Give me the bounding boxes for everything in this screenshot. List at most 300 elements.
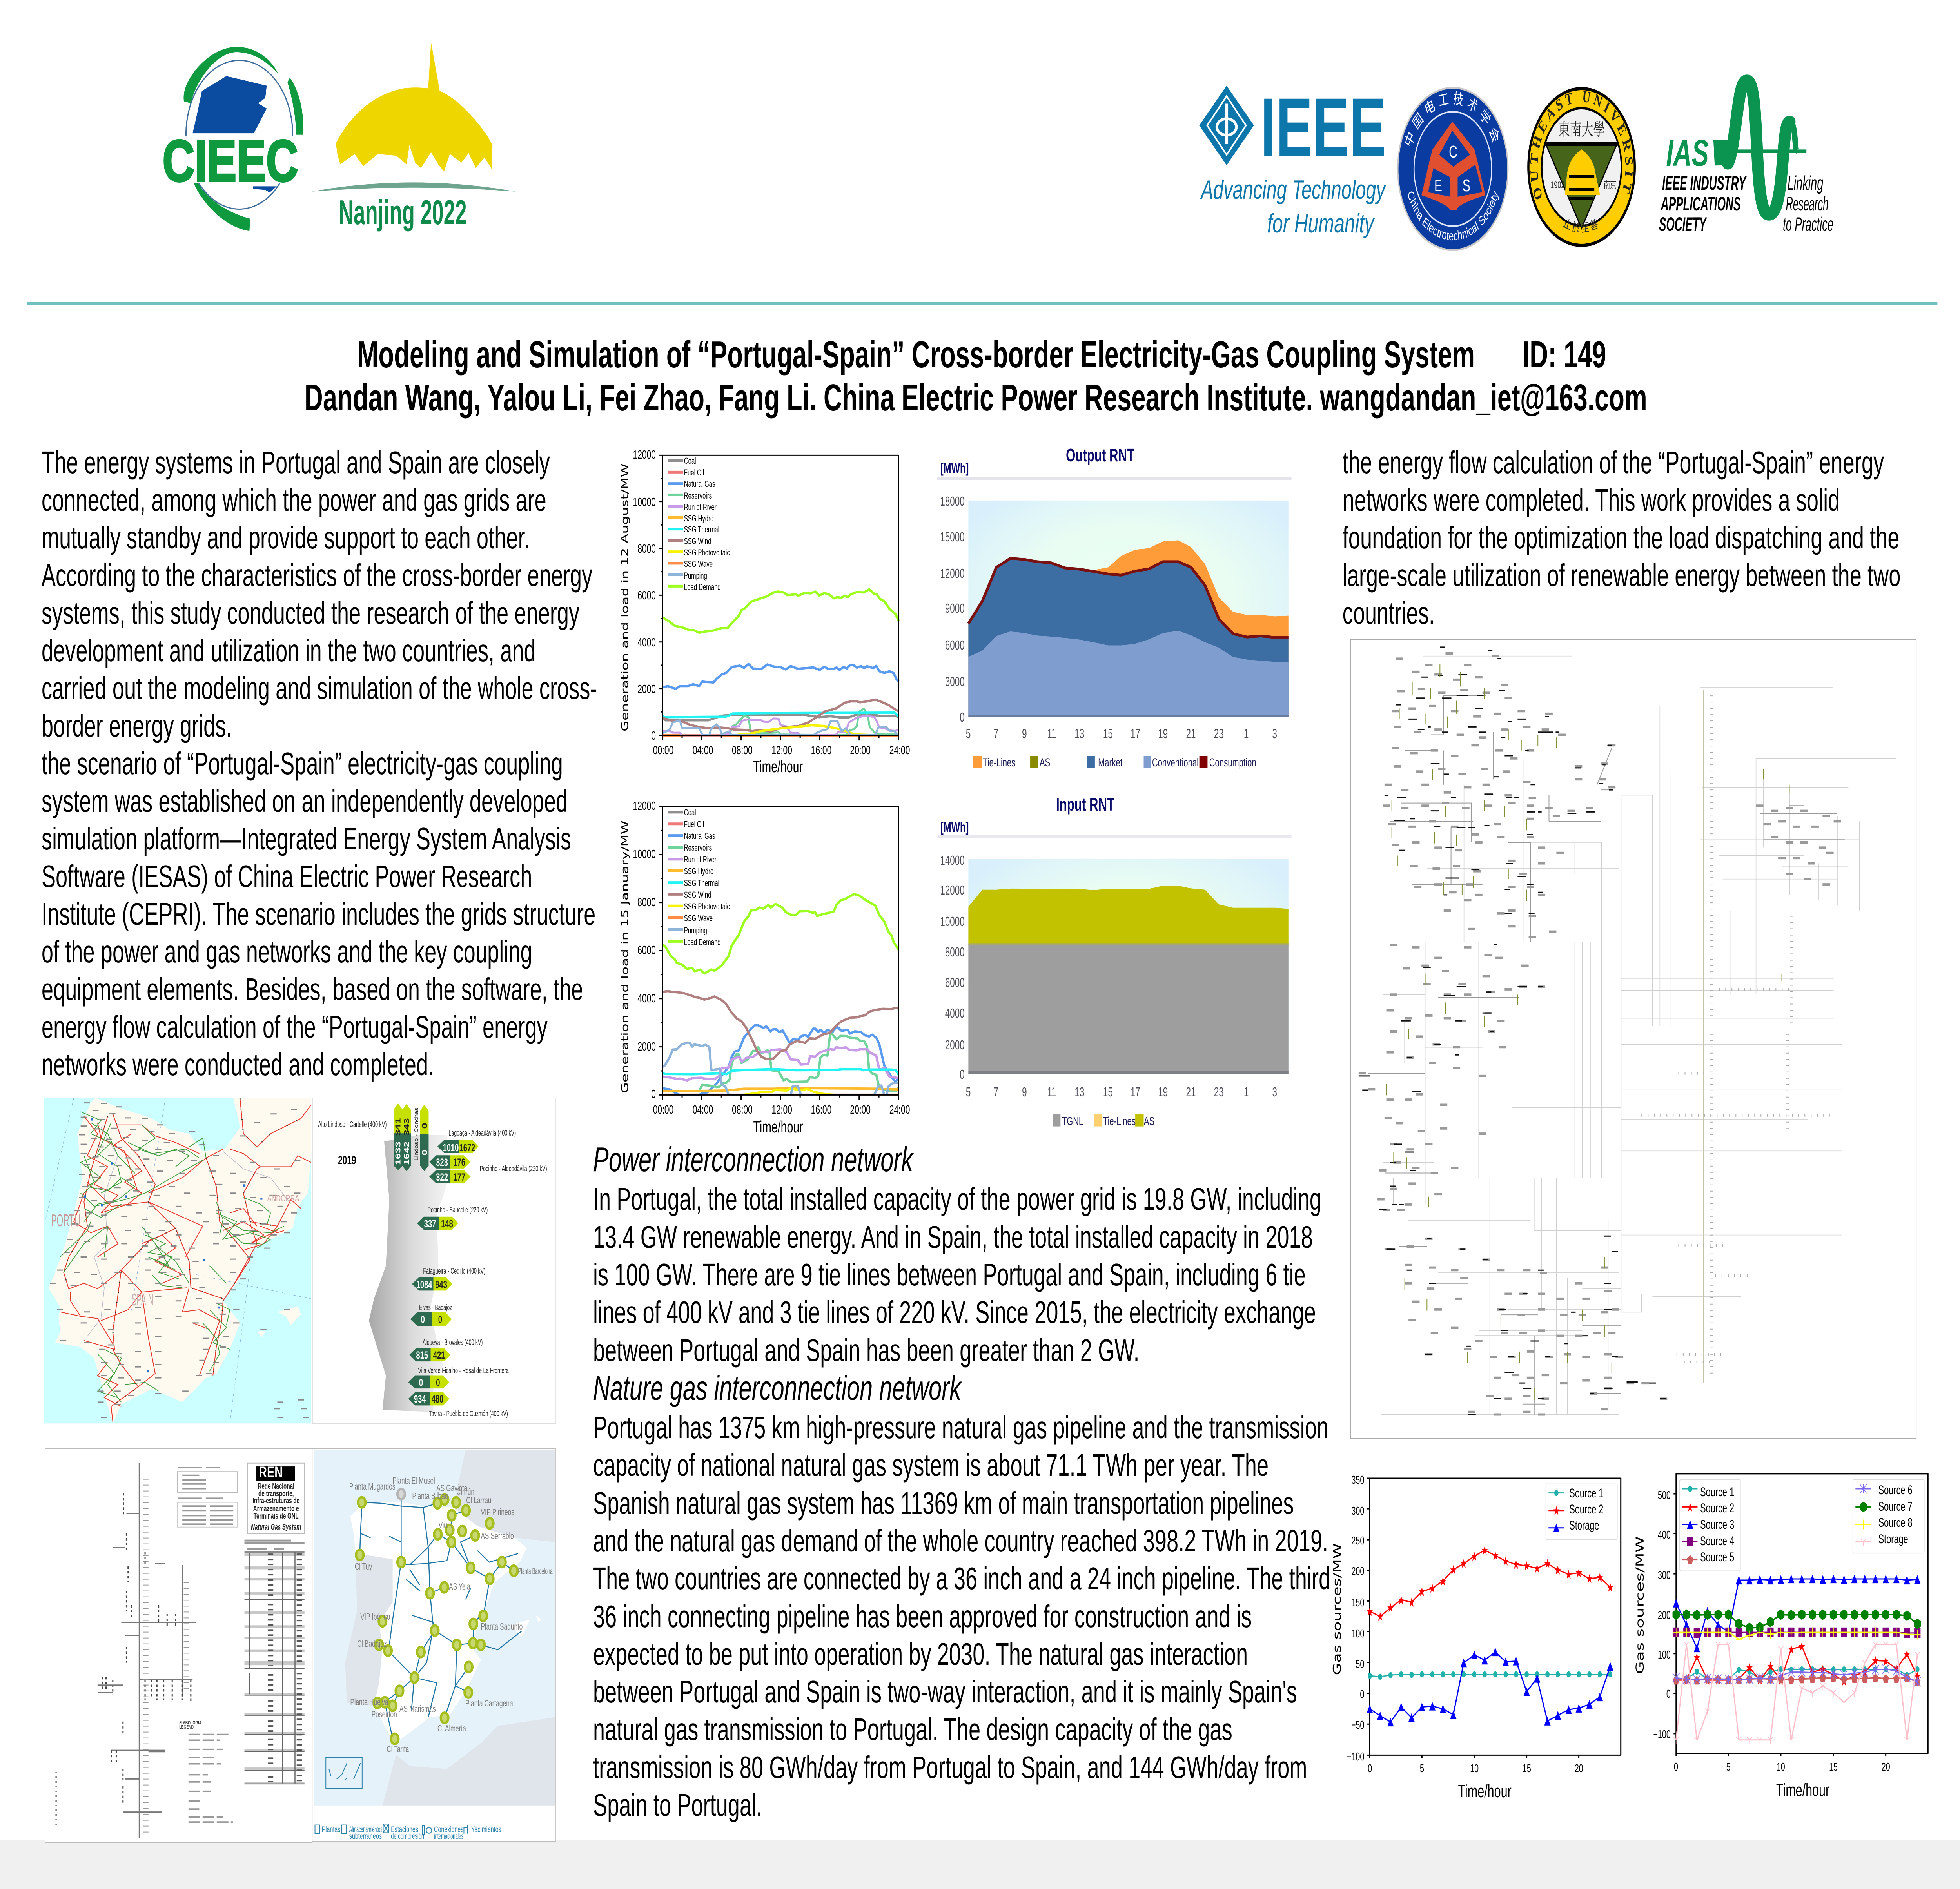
map: tie line flows 2019: 341 <box>394 1118 402 1136</box>
chart: generation and load 12 August: SSG Photovoltaic <box>684 548 730 557</box>
chart: Input RNT: 0 <box>960 1067 965 1082</box>
chart: generation and load 15 January: 8000 <box>637 895 656 909</box>
map: Spanish gas network <box>312 1449 556 1841</box>
map: tie line flows 2019: Tavira - Puebla de Guzmán (400 kV) <box>429 1409 508 1418</box>
text block: introduction: development and utilization in the two countries, and <box>42 633 536 668</box>
chart: generation and load 15 January: 12:00 <box>771 1103 792 1116</box>
map: Spanish gas network: Planta Sagunto <box>481 1622 523 1632</box>
chart: generation and load 12 August: Pumping <box>684 571 707 581</box>
text block: introduction: mutually standby and provide support to each other. <box>42 521 530 555</box>
chart: Output RNT: 9000 <box>945 601 965 615</box>
text block: power interconnection: In Portugal, the total installed capacity of the power grid is 19.8 GW, including <box>593 1182 1321 1217</box>
logo: IEEE Industry Applications Society: IAS <box>1666 132 1709 174</box>
chart: Input RNT: 10000 <box>940 914 965 929</box>
chart: gas sources 9-source case: 100 <box>1658 1649 1671 1661</box>
chart: generation and load 12 August: SSG Hydro <box>684 514 713 523</box>
text block: power interconnection: between Portugal and Spain has been greater than 2 GW. <box>593 1333 1140 1368</box>
chart: Output RNT: AS <box>1040 756 1050 769</box>
chart: generation and load 15 January: 2000 <box>637 1040 656 1053</box>
paper ID: ID: 149 <box>1523 334 1606 376</box>
logo: CIEEC: CIEEC <box>163 128 298 194</box>
chart: Output RNT: 13 <box>1074 726 1084 741</box>
text block: introduction: system was established on an independently developed <box>42 784 568 819</box>
chart: generation and load 12 August: Time/hour <box>753 758 803 776</box>
map: Iberian power grid: SPAIN <box>132 1290 153 1309</box>
map: tie line flows 2019: 1642 <box>403 1141 410 1165</box>
map: tie line flows 2019: 934 <box>414 1393 426 1405</box>
chart: generation and load 12 August: 10000 <box>633 495 656 509</box>
chart: gas sources 3-source case: 150 <box>1352 1597 1364 1609</box>
map: Spanish gas network: internacionales <box>434 1831 463 1841</box>
chart: Input RNT <box>937 795 1292 1128</box>
chart: Input RNT: 19 <box>1158 1085 1168 1099</box>
map: Spanish gas network: AS Gaviota <box>436 1483 467 1493</box>
chart: generation and load 12 August: 04:00 <box>693 743 713 757</box>
logo: China Electrotechnical Society: China Electrotechnical Society <box>1405 188 1500 243</box>
map: tie line flows 2019: Alto Lindoso - Cartelle (400 kV) <box>318 1120 387 1129</box>
chart: Output RNT: 11 <box>1047 726 1056 741</box>
chart: generation and load 12 August: 4000 <box>637 635 656 649</box>
map: Spanish gas network: Cl Larrau <box>466 1495 491 1506</box>
chart: generation and load 15 January: Coal <box>684 807 696 817</box>
map: tie line flows 2019: 323 <box>436 1156 448 1168</box>
chart: gas sources 9-source case: 300 <box>1658 1569 1671 1582</box>
text block: gas interconnection: transmission is 80 GWh/day from Portugal to Spain, and 144 GWh/day from <box>593 1750 1307 1785</box>
logo: IEEE: Advancing Technology <box>1200 175 1386 205</box>
chart: generation and load 12 August: SSG Wave <box>684 559 713 569</box>
map: tie line flows 2019: Alqueva - Brovales (400 kV) <box>423 1338 483 1347</box>
chart: generation and load 12 August: 24:00 <box>889 743 910 757</box>
chart: gas sources 3-source case: 50 <box>1356 1658 1364 1671</box>
map: tie line flows 2019: 0 <box>436 1376 440 1388</box>
chart: Input RNT: 9 <box>1022 1085 1027 1099</box>
chart: generation and load 15 January: SSG Wave <box>684 913 713 923</box>
map: Spanish gas network: Almacenamientos <box>349 1825 383 1834</box>
chart: Output RNT: Market <box>1098 756 1122 769</box>
map: Spanish gas network: Cl Tarifa <box>387 1744 409 1755</box>
logo: Southeast University: 止於至善 <box>1563 216 1601 235</box>
chart: gas sources 9-source case: Source 2 <box>1700 1501 1734 1515</box>
map: tie line flows 2019: Lindoso - Conchas <box>413 1107 419 1160</box>
map: Spanish gas network: VIP Pirineos <box>481 1507 514 1517</box>
text block: gas interconnection <box>593 1410 1330 1823</box>
chart: gas sources 9-source case: Source 5 <box>1700 1550 1734 1564</box>
chart: gas sources 3-source case: 0 <box>1360 1688 1364 1701</box>
logo: IEEE Industry Applications Society: to Practice <box>1783 214 1833 236</box>
map: Spanish gas network: AS Marismas <box>399 1704 436 1714</box>
text block: power interconnection: 13.4 GW renewable energy. And in Spain, the total installed capacity in 2018 <box>593 1220 1313 1255</box>
chart: gas sources 9-source case: 20 <box>1882 1761 1890 1773</box>
chart: generation and load 15 January: Time/hour <box>753 1118 803 1136</box>
text block: power interconnection: lines of 400 kV and 3 tie lines of 220 kV. Since 2015, the electricity exchange <box>593 1295 1316 1330</box>
map: tie line flows 2019: 343 <box>403 1118 410 1136</box>
text block: introduction: Software (IESAS) of China Electric Power Research <box>42 859 532 894</box>
chart: generation and load 15 January: 08:00 <box>732 1103 753 1116</box>
logo: China Electrotechnical Society: 中国电工技术学会 <box>1403 90 1503 150</box>
map: tie line flows 2019: 177 <box>453 1171 465 1183</box>
chart: generation and load 15 January: Natural Gas <box>684 831 715 841</box>
chart: gas sources 3-source case: Source 1 <box>1569 1486 1603 1500</box>
map: tie line flows 2019: 480 <box>432 1393 443 1405</box>
chart: Input RNT: 7 <box>993 1085 998 1099</box>
chart: Input RNT: 23 <box>1214 1085 1224 1099</box>
chart: Output RNT: 18000 <box>940 494 965 508</box>
map: Spanish gas network: Poseidón <box>372 1709 397 1720</box>
chart: gas sources 9-source case: Gas sources/MW <box>1633 1536 1646 1674</box>
text block: gas interconnection: Portugal has 1375 km high-pressure natural gas pipeline and the transmission <box>593 1410 1328 1445</box>
chart: gas sources 3-source case: 0 <box>1368 1762 1372 1775</box>
text block: gas interconnection: expected to be put into operation by 2030. The natural gas interaction <box>593 1637 1248 1672</box>
chart: gas sources 9-source case: Source 7 <box>1878 1499 1913 1513</box>
map: Spanish gas network: Cl Irún <box>456 1487 474 1497</box>
chart: generation and load 15 January: Reservoirs <box>684 843 712 853</box>
chart: Output RNT: 9 <box>1022 726 1027 741</box>
chart: Input RNT: 3 <box>1272 1085 1277 1099</box>
chart: Output RNT: Tie-Lines <box>983 756 1015 769</box>
logo: China Electrotechnical Society <box>1398 88 1508 250</box>
map: tie line flows 2019: 337 <box>424 1218 436 1230</box>
chart: Output RNT: 3 <box>1272 726 1277 741</box>
map: tie line flows 2019: 815 <box>416 1349 428 1361</box>
chart: Input RNT: 21 <box>1186 1085 1196 1099</box>
chart: generation and load 12 August: 16:00 <box>811 743 831 757</box>
chart: gas sources 3-source case: 250 <box>1352 1535 1364 1547</box>
chart: generation and load 12 August: 12:00 <box>771 743 792 757</box>
chart: gas sources 9-source case: Source 3 <box>1700 1517 1734 1532</box>
logo: IEEE: for Humanity <box>1267 209 1375 238</box>
chart: Input RNT: TGNL <box>1062 1115 1083 1128</box>
chart: Output RNT: Output RNT <box>1066 445 1134 466</box>
text block: introduction: Institute (CEPRI). The scenario includes the grids structure <box>42 897 595 932</box>
map: Spanish gas network: Planta El Musel <box>392 1476 435 1486</box>
text block: introduction: The energy systems in Portugal and Spain are closely <box>42 445 550 480</box>
chart: Output RNT: 6000 <box>945 638 965 652</box>
map: tie line flows 2019: 943 <box>435 1278 447 1290</box>
logo: IEEE Industry Applications Society: APPLICATIONS <box>1661 193 1741 215</box>
chart: gas sources 9-source case: 500 <box>1658 1489 1671 1502</box>
text block: power interconnection <box>593 1182 1321 1368</box>
chart: generation and load 12 August: SSG Wind <box>684 536 711 546</box>
text block: introduction: of the power and gas networks and the key coupling <box>42 935 532 969</box>
chart: generation and load 15 January: 24:00 <box>889 1103 910 1116</box>
logo: IEEE Industry Applications Society: Linking <box>1788 172 1823 194</box>
map: Spanish gas network: Planta Bilbao <box>412 1491 448 1501</box>
map: tie line flows 2019: 1672 <box>459 1141 475 1154</box>
chart: generation and load 12 August: 2000 <box>637 682 656 696</box>
text block: power interconnection: is 100 GW. There are 9 tie lines between Portugal and Spain, including 6 tie <box>593 1258 1306 1292</box>
chart: gas sources 3-source case: Storage <box>1569 1518 1599 1532</box>
chart: generation and load 12 August: 00:00 <box>653 743 673 757</box>
text block: introduction: equipment elements. Besides, based on the software, the <box>42 972 583 1007</box>
chart: Input RNT: 14000 <box>940 853 965 867</box>
chart: Output RNT: [MWh] <box>940 461 969 476</box>
chart: Output RNT: 15 <box>1103 726 1113 741</box>
chart: Input RNT: 15 <box>1103 1085 1113 1099</box>
map: tie line flows 2019: 1633 <box>394 1141 402 1165</box>
text block: gas interconnection: between Portugal and Spain is two-way interaction, and it is mainly Spain's <box>593 1675 1297 1709</box>
chart: generation and load 15 January: SSG Hydro <box>684 866 713 876</box>
chart: generation and load 12 August: Fuel Oil <box>684 468 704 477</box>
map: Spanish gas network: Planta Mugardos <box>349 1482 396 1492</box>
map: tie line flows 2019: 421 <box>433 1349 445 1361</box>
text block: gas interconnection: Spanish natural gas system has 11369 km of main transportation pipelines <box>593 1486 1294 1521</box>
diagram: Portugal-Spain power and gas network model <box>1350 639 1916 1439</box>
header divider <box>27 302 1937 305</box>
logo: China Electrotechnical Society: S <box>1463 176 1470 195</box>
chart: Output RNT: 15000 <box>940 530 965 544</box>
chart: generation and load 15 January: Run of River <box>684 855 717 864</box>
logo: CIEEC <box>163 47 309 231</box>
map: Spanish gas network: VIP Ibérico <box>360 1612 390 1622</box>
chart: generation and load 12 August: Reservoirs <box>684 491 712 501</box>
map: Spanish gas network: Planta Cartagena <box>465 1698 513 1709</box>
chart: generation and load 12 August: Natural Gas <box>684 479 715 489</box>
chart: gas sources 3-source case: 350 <box>1352 1474 1364 1486</box>
chart: generation and load 12 August: 6000 <box>637 588 656 602</box>
map: Spanish gas network: AS Yela <box>449 1582 470 1592</box>
logo: Southeast University: 南京 <box>1604 180 1616 191</box>
chart: Output RNT <box>937 445 1292 769</box>
map: tie line flows 2019 <box>312 1098 556 1423</box>
chart: Output RNT: 1 <box>1244 726 1249 741</box>
map: tie line flows 2019: 176 <box>453 1156 465 1168</box>
map: Spanish gas network: C. Almería <box>437 1724 466 1734</box>
chart: Output RNT: Consumption <box>1209 756 1256 769</box>
chart: generation and load 12 August: 0 <box>651 729 656 742</box>
chart: Input RNT: 4000 <box>945 1006 965 1020</box>
map: tie line flows 2019: Vila Verde Ficalho - Rosal de La Frontera <box>418 1366 509 1375</box>
chart: generation and load 15 January: 04:00 <box>693 1103 713 1116</box>
chart: Input RNT: 8000 <box>945 945 965 959</box>
text block: introduction: border energy grids. <box>42 709 232 744</box>
chart: generation and load 15 January: 10000 <box>633 847 656 861</box>
chart: generation and load 15 January: 16:00 <box>811 1103 831 1116</box>
chart: Input RNT: Input RNT <box>1056 795 1114 815</box>
chart: generation and load 15 January: 6000 <box>637 943 656 957</box>
map: tie line flows 2019: 0 <box>421 1123 429 1129</box>
chart: Output RNT: 17 <box>1131 726 1140 741</box>
map: Spanish gas network: subterráneos <box>349 1831 382 1841</box>
chart: gas sources 3-source case: Time/hour <box>1458 1782 1512 1802</box>
map: tie line flows 2019: 1010 <box>443 1141 459 1154</box>
text block: introduction <box>42 445 597 1082</box>
chart: Output RNT: 23 <box>1214 726 1224 741</box>
chart: generation and load 12 August: Coal <box>684 456 696 466</box>
logo: IEEE Industry Applications Society: Research <box>1786 193 1828 215</box>
map: tie line flows 2019: Falagueira - Cedillo (400 kV) <box>423 1267 485 1276</box>
chart: gas sources 3-source case <box>1331 1474 1621 1802</box>
map: Spanish gas network: de compresión <box>391 1831 424 1841</box>
chart: gas sources 9-source case: Storage <box>1878 1532 1908 1546</box>
chart: gas sources 3-source case: 5 <box>1420 1762 1424 1775</box>
text block: introduction: carried out the modeling and simulation of the whole cross- <box>42 671 597 706</box>
chart: Output RNT: 3000 <box>945 674 965 689</box>
chart: gas sources 3-source case: Source 2 <box>1569 1502 1603 1516</box>
chart: Output RNT: Conventional <box>1152 756 1199 769</box>
map: tie line flows 2019: Lagoaça - Aldeadávila (400 kV) <box>449 1129 516 1138</box>
chart: generation and load 12 August <box>619 448 910 776</box>
map: tie line flows 2019: 148 <box>441 1218 453 1230</box>
diagram: REN national gas system: Terminais de GNL <box>254 1512 299 1521</box>
chart: gas sources 3-source case: −50 <box>1351 1719 1364 1731</box>
logo: IEEE: IEEE <box>1261 80 1386 174</box>
map: Spanish gas network: Estaciones <box>391 1825 418 1834</box>
diagram: REN national gas system: REN <box>259 1464 283 1481</box>
chart: generation and load 12 August: SSG Thermal <box>684 524 719 534</box>
chart: gas sources 9-source case: 0 <box>1666 1688 1671 1700</box>
map: tie line flows 2019: 0 <box>438 1313 442 1325</box>
chart: gas sources 3-source case: 15 <box>1523 1762 1531 1775</box>
chart: gas sources 9-source case: 10 <box>1777 1761 1785 1773</box>
diagram: REN national gas system: Infra-estruturas de <box>252 1496 299 1505</box>
logo: IEEE Industry Applications Society: SOCIETY <box>1659 214 1707 236</box>
text block: introduction: the scenario of “Portugal-Spain” electricity-gas coupling <box>42 746 563 781</box>
text block: conclusion: foundation for the optimization the load dispatching and the <box>1343 521 1900 555</box>
diagram: REN national gas system <box>45 1449 312 1842</box>
chart: gas sources 9-source case: 0 <box>1674 1761 1678 1773</box>
logo: IEEE <box>1199 80 1386 238</box>
map: tie line flows 2019: Pocinho - Saucelle (220 kV) <box>428 1205 488 1214</box>
logo: Nanjing 2022 <box>311 42 516 232</box>
chart: Input RNT: Tie-Lines <box>1103 1115 1136 1128</box>
text block: conclusion: countries. <box>1343 596 1435 631</box>
chart: generation and load 15 January: Fuel Oil <box>684 819 704 829</box>
logo: Nanjing 2022: Nanjing 2022 <box>339 193 467 232</box>
chart: Input RNT: 11 <box>1047 1085 1056 1099</box>
chart: gas sources 9-source case: Source 6 <box>1878 1483 1913 1497</box>
text block: introduction: According to the characteristics of the cross-border energy <box>42 558 593 593</box>
chart: gas sources 3-source case: 300 <box>1352 1505 1364 1517</box>
chart: gas sources 9-source case: Source 1 <box>1700 1485 1734 1499</box>
chart: Output RNT: 12000 <box>940 566 965 581</box>
map: Spanish gas network: Planta Barcelona <box>518 1566 553 1577</box>
heading: nature gas interconnection network: Nature gas interconnection network <box>593 1368 962 1407</box>
chart: gas sources 9-source case: 15 <box>1829 1761 1838 1773</box>
logo: IEEE Industry Applications Society: IEEE INDUSTRY <box>1662 172 1747 194</box>
chart: generation and load 15 January: 4000 <box>637 991 656 1005</box>
chart: generation and load 15 January: 12000 <box>633 799 656 813</box>
text block: conclusion <box>1343 445 1900 631</box>
chart: generation and load 15 January <box>619 799 910 1136</box>
title: paper title: Modeling and Simulation of “Portugal-Spain” Cross-border Electricity-Gas Coupling System <box>357 334 1475 376</box>
chart: Output RNT: 19 <box>1158 726 1168 741</box>
chart: gas sources 9-source case: Time/hour <box>1776 1780 1829 1800</box>
map: Iberian power grid: ANDORRA <box>267 1193 299 1204</box>
map: Iberian power grid <box>44 1098 311 1423</box>
text block: introduction: energy flow calculation of the “Portugal-Spain” energy <box>42 1010 548 1045</box>
map: Spanish gas network: Viura <box>439 1521 453 1531</box>
text block: conclusion: large-scale utilization of renewable energy between the two <box>1343 558 1900 593</box>
chart: generation and load 12 August: 12000 <box>633 448 656 461</box>
chart: Input RNT: 1 <box>1244 1085 1249 1099</box>
chart: gas sources 3-source case: 200 <box>1352 1565 1364 1578</box>
map: Spanish gas network: Yacimientos <box>471 1825 501 1834</box>
chart: Input RNT: 12000 <box>940 883 965 897</box>
logo: China Electrotechnical Society: E <box>1434 176 1442 195</box>
logo: Southeast University: 1902 <box>1550 180 1564 191</box>
diagram: REN national gas system: LEGEND <box>179 1724 194 1730</box>
map: Iberian power grid: PORTU <box>51 1210 80 1230</box>
chart: gas sources 3-source case: Gas sources/MW <box>1331 1543 1343 1675</box>
map: tie line flows 2019: 1084 <box>416 1278 432 1290</box>
chart: generation and load 12 August: 08:00 <box>732 743 753 757</box>
map: tie line flows 2019: Pocinho - Aldeadávila (220 kV) <box>480 1164 547 1173</box>
diagram: REN national gas system: SIMBOLOGIA <box>179 1720 201 1726</box>
page footer band <box>0 1840 1960 1889</box>
map: tie line flows 2019: 0 <box>421 1313 425 1325</box>
chart: generation and load 15 January: 00:00 <box>653 1103 673 1116</box>
chart: gas sources 9-source case: Source 8 <box>1878 1515 1913 1530</box>
chart: gas sources 3-source case: 20 <box>1575 1762 1583 1775</box>
chart: gas sources 9-source case <box>1633 1474 1928 1800</box>
authors line: Dandan Wang, Yalou Li, Fei Zhao, Fang Li. China Electric Power Research Institute. wangdandan_iet@163.com <box>305 377 1647 419</box>
chart: Output RNT: 21 <box>1186 726 1196 741</box>
chart: gas sources 3-source case: 100 <box>1352 1628 1364 1640</box>
text block: gas interconnection: natural gas transmission to Portugal. The design capacity of the gas <box>593 1712 1232 1747</box>
chart: Input RNT: 6000 <box>945 975 965 990</box>
chart: Input RNT: 2000 <box>945 1038 965 1052</box>
chart: generation and load 15 January: Generation and load in 15 January/MW <box>619 820 630 1093</box>
map: tie line flows 2019: 0 <box>421 1149 429 1156</box>
map: Spanish gas network: Conexiones <box>434 1825 463 1834</box>
chart: gas sources 9-source case: 200 <box>1658 1609 1671 1622</box>
chart: generation and load 12 August: Generation and load in 12 August/MW <box>619 463 630 731</box>
diagram: REN national gas system: Armazenamento e <box>253 1504 299 1513</box>
chart: gas sources 9-source case: −100 <box>1653 1728 1671 1741</box>
diagram: REN national gas system: Rede Nacional <box>258 1482 294 1491</box>
chart: Input RNT: [MWh] <box>940 820 969 835</box>
text block: introduction: networks were conducted and completed. <box>42 1047 434 1082</box>
chart: Input RNT: AS <box>1144 1115 1154 1128</box>
chart: generation and load 15 January: 0 <box>651 1087 656 1101</box>
logo: Southeast University: 東南大學 <box>1558 116 1605 140</box>
chart: gas sources 9-source case: 400 <box>1658 1529 1671 1541</box>
chart: generation and load 15 January: SSG Wind <box>684 890 711 900</box>
chart: generation and load 12 August: Run of River <box>684 502 717 512</box>
chart: generation and load 15 January: Pumping <box>684 925 707 935</box>
chart: generation and load 15 January: Load Demand <box>684 937 721 947</box>
text block: gas interconnection: capacity of national natural gas system is about 71.1 TWh per year. The <box>593 1448 1269 1483</box>
chart: gas sources 3-source case: 10 <box>1470 1762 1479 1775</box>
chart: generation and load 15 January: 20:00 <box>850 1103 871 1116</box>
text block: gas interconnection: 36 inch connecting pipeline has been approved for construction and is <box>593 1599 1252 1634</box>
chart: Output RNT: 5 <box>966 726 971 741</box>
text block: introduction: connected, among which the power and gas grids are <box>42 483 546 518</box>
chart: generation and load 12 August: 8000 <box>637 542 656 555</box>
chart: generation and load 12 August: Load Demand <box>684 582 721 592</box>
map: Spanish gas network: Plantas <box>322 1825 340 1834</box>
map: tie line flows 2019: 0 <box>419 1376 423 1388</box>
logo: IEEE Industry Applications Society <box>1659 80 1833 236</box>
map: tie line flows 2019: Elvas - Badajoz <box>419 1303 452 1312</box>
heading: power interconnection network: Power interconnection network <box>593 1140 914 1179</box>
map: tie line flows 2019: 322 <box>436 1171 448 1183</box>
text block: conclusion: the energy flow calculation of the “Portugal-Spain” energy <box>1343 445 1884 480</box>
map: Spanish gas network: AS Serrablo <box>481 1531 514 1541</box>
chart: Input RNT: 13 <box>1074 1085 1084 1099</box>
map: Spanish gas network: Cl Tuy <box>355 1562 372 1572</box>
chart: Output RNT: 0 <box>960 710 965 724</box>
diagram: REN national gas system: Natural Gas System <box>251 1522 301 1532</box>
map: Spanish gas network: Cl Badajoz <box>357 1639 387 1649</box>
text block: introduction: simulation platform—Integrated Energy System Analysis <box>42 822 571 856</box>
logo: China Electrotechnical Society: C <box>1449 142 1457 161</box>
chart: Output RNT: 7 <box>993 726 998 741</box>
chart: generation and load 15 January: SSG Thermal <box>684 878 719 888</box>
map: Spanish gas network: Planta Huelva <box>350 1697 388 1708</box>
text block: gas interconnection: and the natural gas demand of the whole country reached 398.2 TWh in 2019. <box>593 1524 1328 1559</box>
text block: conclusion: networks were completed. This work provides a solid <box>1343 483 1840 518</box>
